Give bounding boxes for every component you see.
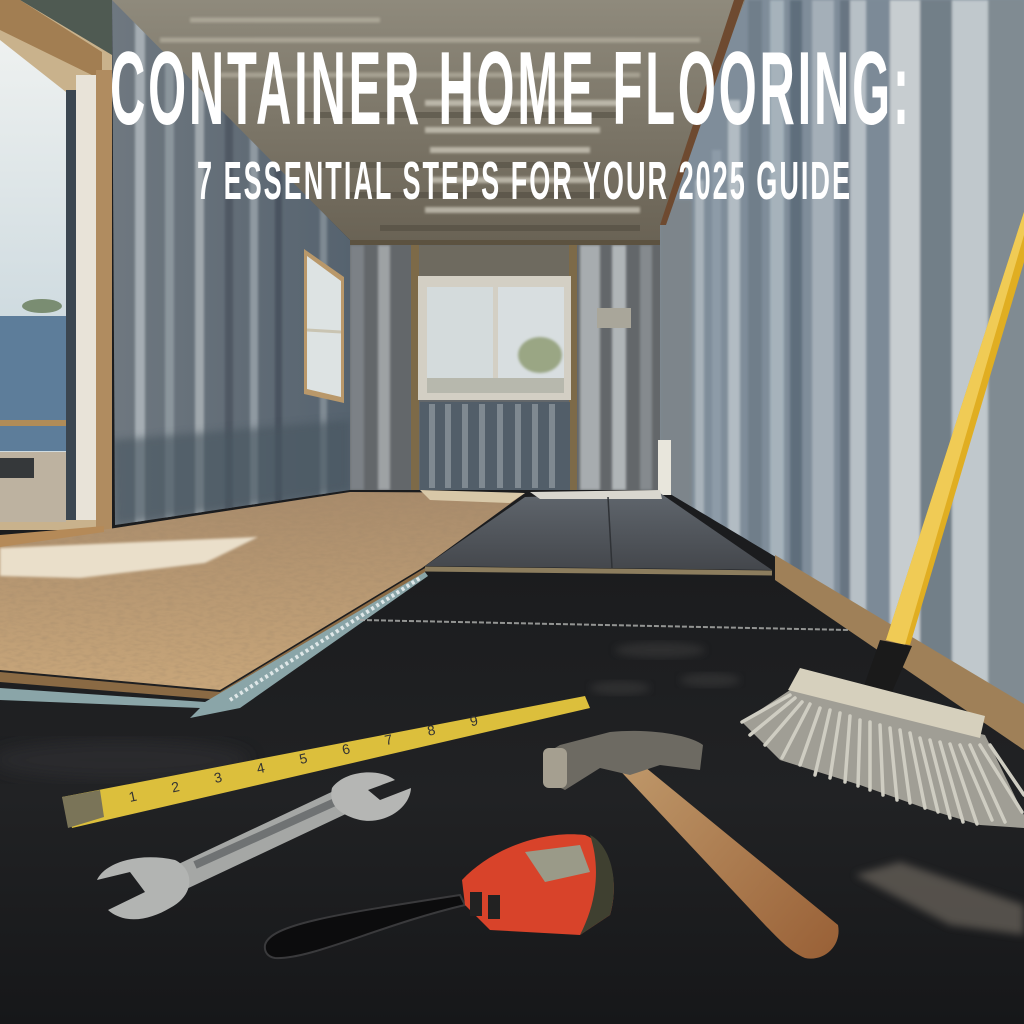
ceiling <box>110 0 750 240</box>
left wall window <box>304 249 344 403</box>
back wall lower panel <box>420 402 570 490</box>
icon: tape ruler: 1 2 3 4 5 6 7 8 9 <box>127 709 495 805</box>
ceiling right beam <box>660 0 744 225</box>
icon: broom with yellow handle <box>742 212 1024 828</box>
floor scuff marks <box>0 642 1024 935</box>
back wall <box>350 238 660 490</box>
right wall corrugation <box>655 0 1024 750</box>
left wall corrugation <box>110 0 350 530</box>
grey tile floor section <box>425 490 772 573</box>
icon: tape measure <box>265 834 614 958</box>
right wall baseboard <box>775 555 1024 750</box>
bright gap by back wall <box>658 440 671 495</box>
OSB subfloor panel <box>0 490 530 700</box>
icon: tape ruler <box>62 696 590 828</box>
floor seam <box>360 620 850 630</box>
icon: wrench <box>97 772 411 919</box>
left door frame <box>0 0 112 530</box>
back window <box>418 276 571 400</box>
blue underlay strip <box>0 572 428 718</box>
icon: hammer <box>543 731 839 959</box>
